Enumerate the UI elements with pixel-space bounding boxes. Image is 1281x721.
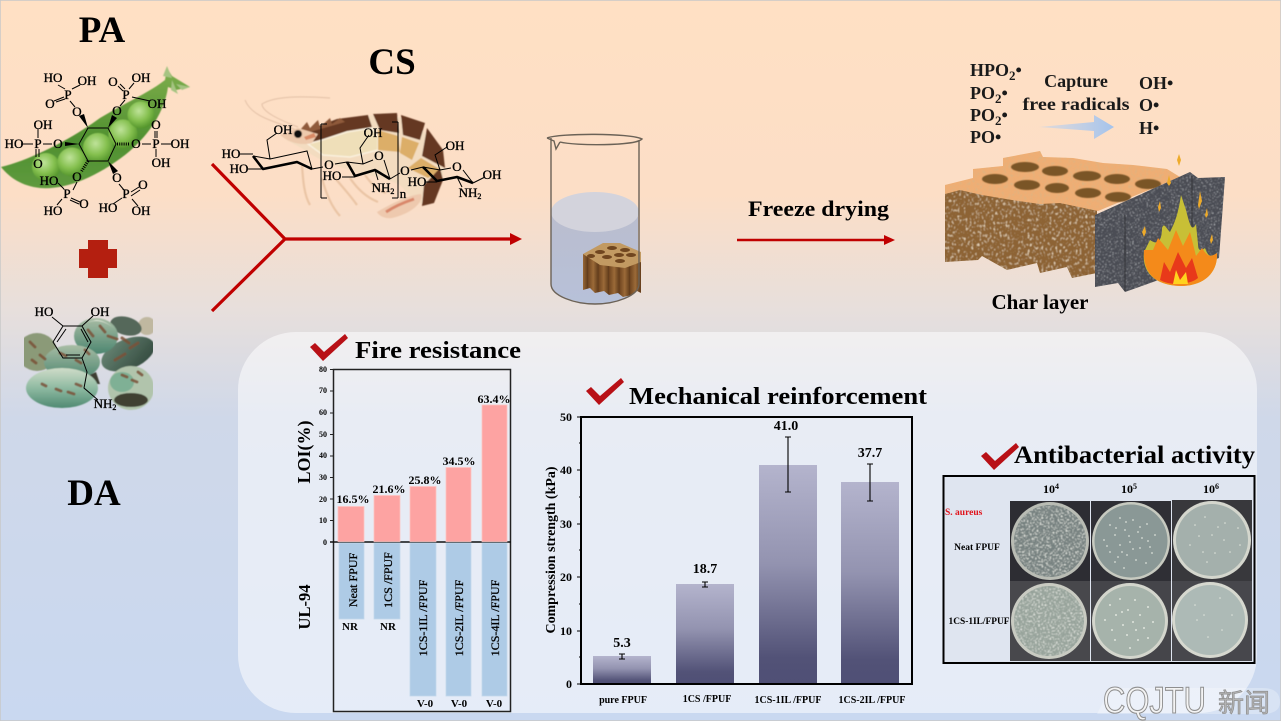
text: phosphorus radicals: 2	[995, 91, 1002, 106]
label: S. aureus: S. aureus	[945, 508, 983, 518]
text: phosphorus radicals: PO•	[970, 127, 1001, 147]
title: CS: CS	[368, 42, 416, 83]
glass outline	[547, 134, 642, 304]
plate: 1CS-1IL 10^6	[1172, 582, 1248, 658]
icon: check mark	[310, 334, 348, 361]
LOI tick labels: 0	[323, 538, 327, 547]
text: capture free radicals	[1022, 71, 1130, 114]
label: Neat FPUF: Neat FPUF	[954, 543, 1000, 553]
values: 5.3	[613, 636, 631, 651]
chemical structure: chitosan: 2	[390, 187, 394, 196]
chart: LOI and UL-94 bars	[294, 365, 511, 712]
chemical structure: phytic acid: P	[122, 87, 130, 102]
axis title: Compression strength (kPa)	[544, 466, 559, 634]
chemical structure: phytic acid: P	[122, 186, 130, 201]
axis title: UL-94: UL-94	[295, 585, 314, 629]
UL-94 ratings	[342, 621, 503, 710]
UL-94 ratings: V-0	[451, 698, 468, 710]
chemical structure: dopamine: NH	[94, 396, 112, 411]
chemical structure: chitosan	[222, 122, 501, 201]
LOI tick labels: 50	[319, 430, 327, 439]
text: oxygen and hydrogen radicals	[1139, 73, 1173, 138]
chemical structure: phytic acid: OH	[132, 70, 150, 85]
y tick labels: 20	[560, 570, 572, 584]
values: 37.7	[858, 446, 882, 461]
text: phosphorus radicals: 2	[1009, 68, 1016, 83]
label: Char layer: Char layer	[991, 290, 1089, 314]
LOI tick labels: 30	[319, 473, 327, 482]
chemical structure: chitosan: OH	[364, 125, 382, 140]
chemical structure: dopamine	[35, 304, 116, 412]
chemical structure: phytic acid: OH	[78, 73, 96, 88]
sample names: 1CS-4IL /FPUF	[488, 579, 502, 656]
arrow: blue capture arrow	[1039, 115, 1114, 139]
error bars	[619, 437, 873, 659]
LOI values: 63.4%	[478, 392, 510, 406]
axis title: LOI: LOI(%)	[294, 420, 315, 484]
icon: pea pod	[1, 66, 190, 188]
water surface	[551, 192, 639, 232]
LOI values: 21.6%	[372, 482, 406, 496]
group: shrimp with chitosan structure	[222, 97, 501, 218]
heading text: Mechanical reinforcement	[629, 384, 927, 410]
honeycomb holes	[982, 162, 1161, 202]
watermark latin: CQJTU	[1103, 680, 1206, 721]
LOI tick labels: 70	[319, 386, 327, 395]
chemical structure: phytic acid: O	[151, 117, 161, 132]
text: phosphorus radicals: •	[1002, 83, 1008, 103]
water	[551, 212, 638, 304]
icon: beaker with foam	[547, 134, 642, 304]
watermark chinese: 新闻	[1218, 688, 1270, 718]
chemical structure: phytic acid: O	[45, 96, 55, 111]
watermark band	[1097, 688, 1280, 714]
text: phosphorus radicals: HPO	[970, 60, 1009, 80]
text: phosphorus radicals: •	[1016, 60, 1022, 80]
chemical structure: phytic acid: O	[72, 169, 82, 184]
charred sheets	[1095, 172, 1225, 292]
group: clam image with dopamine structure	[24, 307, 153, 410]
chemical structure: chitosan: OH	[274, 122, 292, 137]
UL-94 ratings: V-0	[417, 698, 434, 710]
dilution labels: 6	[1215, 482, 1219, 491]
icon: honeycomb foam	[583, 243, 641, 297]
chemical structure: phytic acid: HO	[44, 203, 62, 218]
chemical structure: phytic acid: P	[64, 87, 72, 102]
y tick labels: 40	[560, 463, 572, 477]
title: PA: PA	[79, 10, 126, 51]
arrow: mixing fork to beaker	[212, 164, 522, 311]
LOI tick labels: 20	[319, 495, 327, 504]
text: oxygen and hydrogen radicals: OH•	[1139, 73, 1173, 93]
chemical structure: dopamine: 2	[112, 403, 116, 412]
text: oxygen and hydrogen radicals: O•	[1139, 95, 1159, 115]
LOI values: 25.8%	[408, 473, 442, 487]
LOI tick labels: 10	[319, 516, 327, 525]
chemical structure: chitosan: OH	[483, 167, 501, 182]
chemical structure: phytic acid: O	[33, 156, 43, 171]
chemical structure: phytic acid: O	[112, 103, 122, 118]
chemical structure: phytic acid: O	[138, 177, 148, 192]
category labels	[599, 694, 905, 706]
chemical structure: phytic acid: OH	[148, 96, 166, 111]
chemical structure: phytic acid: P	[34, 136, 42, 151]
sample names: Neat FPUF	[346, 553, 360, 607]
text: capture free radicals: free radicals	[1022, 94, 1130, 114]
chemical structure: dopamine: HO	[35, 304, 53, 319]
chemical structure: chitosan: O	[400, 163, 410, 178]
y tick labels: 10	[560, 624, 572, 638]
y tick labels: 0	[566, 677, 572, 691]
text: phosphorus radicals: •	[1002, 105, 1008, 125]
LOI tick labels: 80	[319, 365, 327, 374]
text: phosphorus radicals	[970, 60, 1022, 147]
group: free radical capture	[970, 60, 1173, 147]
chemical structure: chitosan: HO	[230, 161, 248, 176]
chemical structure: phytic acid: P	[63, 186, 71, 201]
chemical structure: phytic acid: OH	[132, 203, 150, 218]
chemical structure: chitosan: HO	[323, 168, 341, 183]
dilution labels: 10	[1043, 482, 1055, 496]
plate: neat 10^6	[1173, 501, 1251, 579]
icon: shrimp	[245, 97, 445, 218]
honeycomb top	[945, 151, 1180, 211]
chemical structure: phytic acid: P	[152, 136, 160, 151]
arrow: freeze drying	[737, 235, 895, 245]
chemical structure: chitosan: NH	[372, 180, 390, 195]
values	[613, 419, 882, 651]
LOI bars	[338, 405, 507, 542]
axis frame	[334, 370, 510, 712]
y tick labels	[560, 410, 572, 691]
chemical structure: phytic acid: O	[108, 74, 118, 89]
plate: neat 10^4	[1011, 502, 1089, 580]
LOI tick labels: 60	[319, 408, 327, 417]
label: 1CS-1IL/FPUF: 1CS-1IL/FPUF	[948, 617, 1010, 627]
panel: antibacterial plates	[944, 476, 1254, 663]
chemical structure: chitosan: OH	[446, 138, 464, 153]
frame	[581, 417, 912, 684]
chemical structure: chitosan: HO	[222, 146, 240, 161]
text: phosphorus radicals: 2	[995, 113, 1002, 128]
icon: red plus	[79, 240, 117, 278]
chemical structure: phytic acid: O	[79, 196, 89, 211]
honeycomb front	[945, 182, 1097, 278]
chemical structure: dopamine: OH	[91, 304, 109, 319]
chemical structure: phytic acid: O	[131, 136, 141, 151]
dilution labels: 5	[1133, 482, 1137, 491]
chemical structure: phytic acid: HO	[40, 173, 58, 188]
category labels: 1CS-1IL /FPUF	[755, 695, 821, 706]
chemical structure: phytic acid: O	[72, 104, 82, 119]
values: 18.7	[693, 562, 717, 577]
text: oxygen and hydrogen radicals: H•	[1139, 118, 1159, 138]
panel: results	[238, 332, 1257, 713]
heading text: Antibacterial activity	[1014, 442, 1256, 469]
chemical structure: chitosan: O	[374, 148, 384, 163]
UL-94 ratings: NR	[342, 621, 359, 633]
chemical structure: phytic acid	[5, 70, 189, 218]
chemical structure: chitosan: NH	[459, 185, 477, 200]
dilution labels: 4	[1055, 482, 1059, 491]
heading: Antibacterial activity	[981, 442, 1256, 470]
category labels: 1CS-2IL /FPUF	[839, 695, 905, 706]
chemical structure: chitosan: O	[324, 157, 334, 172]
heading: Fire resistance	[310, 334, 521, 364]
LOI values	[336, 392, 510, 506]
y tick labels: 50	[560, 410, 572, 424]
UL-94 bars	[339, 543, 507, 696]
category labels: 1CS /FPUF	[683, 694, 731, 705]
sample names: 1CS /FPUF	[381, 552, 395, 608]
chemical structure: phytic acid: O	[112, 170, 122, 185]
chemical structure: phytic acid: OH	[34, 117, 52, 132]
chart: compression strength	[544, 410, 912, 706]
sample names: 1CS-2IL /FPUF	[452, 579, 466, 656]
frame	[944, 476, 1254, 663]
heading text: Fire resistance	[355, 338, 521, 364]
dilution labels: 10	[1203, 482, 1215, 496]
group: pea pod with phytic acid structure	[1, 66, 190, 218]
chemical structure: chitosan: O	[452, 159, 462, 174]
chemical structure: chitosan: HO	[408, 174, 426, 189]
watermark: CQJTU news	[1097, 680, 1280, 721]
LOI tick labels: 40	[319, 451, 327, 460]
plate: neat 10^5	[1092, 502, 1170, 580]
LOI tick labels	[319, 365, 334, 547]
y ticks	[577, 417, 581, 684]
mid axis	[330, 541, 511, 543]
title: DA: DA	[67, 473, 121, 514]
category labels: pure FPUF	[599, 695, 647, 706]
chemical structure: chitosan: n	[400, 186, 407, 201]
chemical structure: phytic acid: HO	[5, 136, 23, 151]
text: phosphorus radicals: PO	[970, 83, 995, 103]
heading: Mechanical reinforcement	[586, 378, 927, 410]
sample names: 1CS-1IL /FPUF	[416, 579, 430, 656]
y tick labels: 30	[560, 517, 572, 531]
icon: check mark	[981, 443, 1019, 470]
dilution labels	[1043, 482, 1219, 496]
plate: 1CS-1IL 10^5	[1092, 583, 1168, 659]
icon: char layer honeycomb	[945, 151, 1225, 292]
chemical structure: phytic acid: HO	[44, 70, 62, 85]
chemical structure: phytic acid: HO	[99, 200, 117, 215]
bars	[593, 465, 899, 684]
values: 41.0	[774, 419, 798, 434]
label: Freeze drying: Freeze drying	[748, 196, 889, 221]
LOI values: 34.5%	[442, 454, 476, 468]
dilution labels: 10	[1121, 482, 1133, 496]
UL-94 ratings: NR	[380, 621, 397, 633]
sample names	[346, 552, 502, 656]
text: phosphorus radicals: PO	[970, 105, 995, 125]
chemical structure: phytic acid: O	[53, 136, 63, 151]
chemical structure: phytic acid: OH	[152, 155, 170, 170]
icon: check mark	[586, 378, 624, 405]
icon: clams	[24, 316, 153, 410]
plate: 1CS-1IL 10^4	[1011, 583, 1087, 659]
UL-94 ratings: V-0	[486, 698, 503, 710]
plate backgrounds	[1010, 500, 1252, 661]
chemical structure: chitosan: 2	[477, 192, 481, 201]
flame	[1142, 154, 1217, 286]
chemical structure: phytic acid: OH	[171, 136, 189, 151]
LOI values: 16.5%	[336, 492, 370, 506]
text: capture free radicals: Capture	[1044, 71, 1108, 91]
